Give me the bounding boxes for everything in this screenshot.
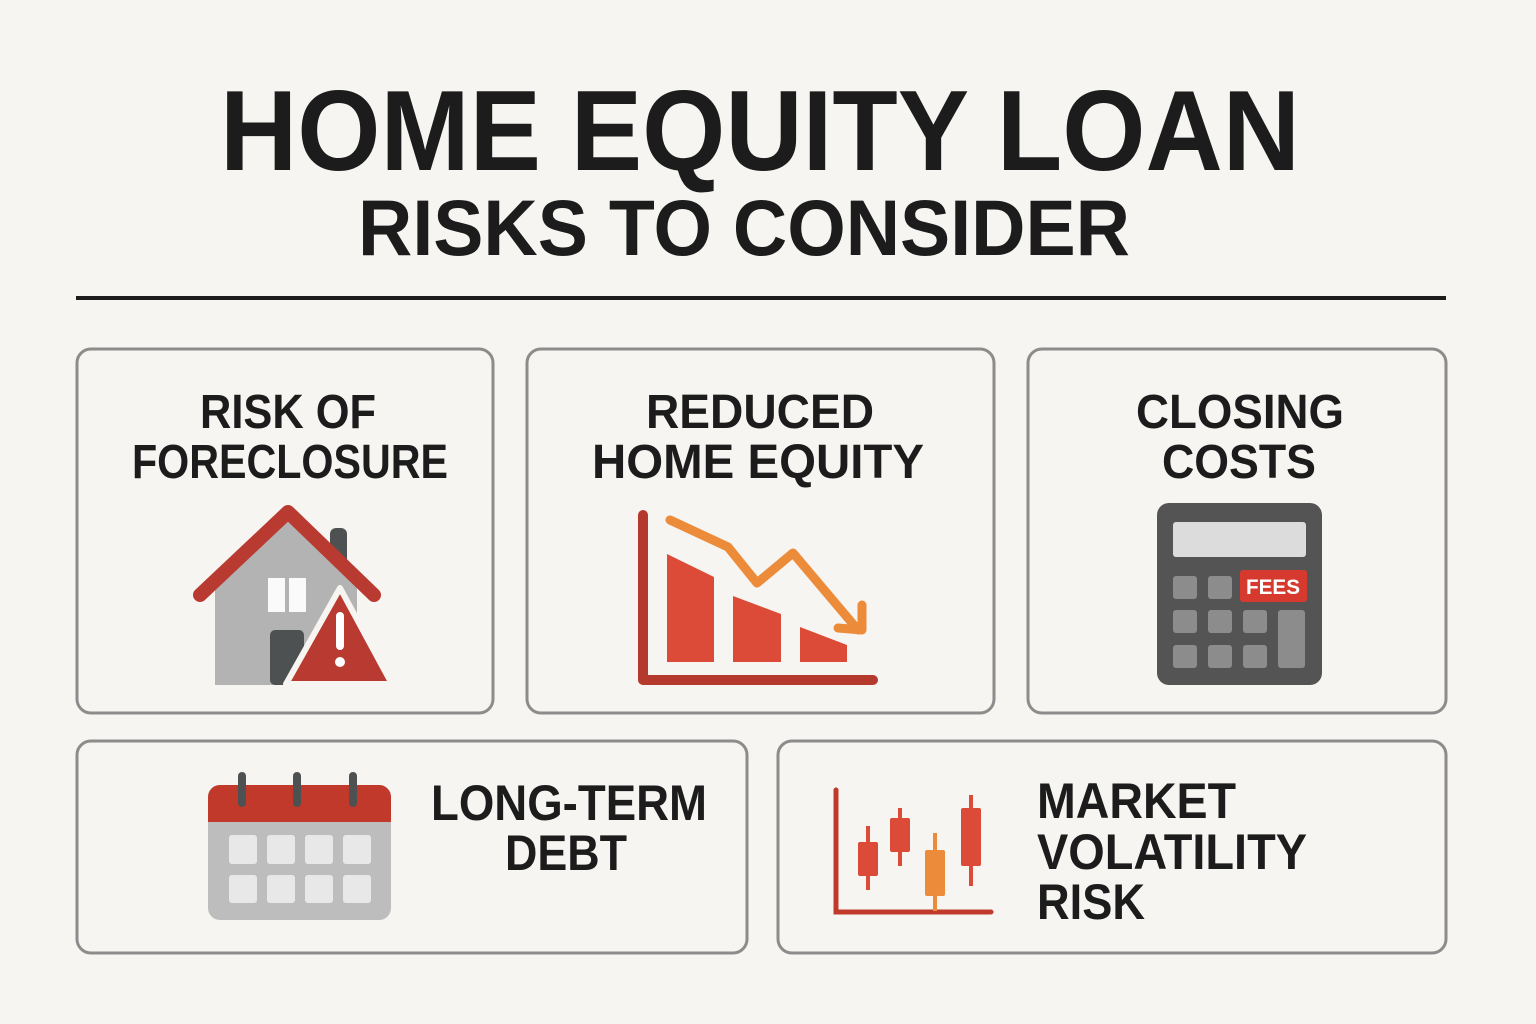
icon: calculator with fees: FEES <box>1246 576 1300 599</box>
heading: market volatility risk: RISK <box>1037 874 1145 930</box>
heading: reduced home equity <box>592 386 924 489</box>
icon: candlestick chart <box>836 790 991 912</box>
subtitle: RISKS TO CONSIDER <box>358 183 1130 272</box>
heading: long-term debt <box>431 775 707 881</box>
heading: long-term debt: LONG-TERM <box>431 775 707 831</box>
icon: calendar <box>208 772 391 920</box>
heading: closing costs <box>1136 386 1344 489</box>
heading: market volatility risk: MARKET <box>1037 773 1236 829</box>
panel: risk of foreclosure <box>77 349 493 713</box>
heading: reduced home equity: REDUCED <box>646 386 874 439</box>
heading: reduced home equity: HOME EQUITY <box>592 436 924 489</box>
title: HOME EQUITY LOAN <box>220 68 1300 195</box>
panel: closing costs <box>1028 349 1446 713</box>
icon: calculator with fees <box>1157 503 1322 685</box>
icon: house with warning <box>200 512 392 685</box>
icon: declining bar chart <box>643 515 873 680</box>
heading: closing costs: CLOSING <box>1136 386 1344 439</box>
heading: risk of foreclosure <box>132 386 448 489</box>
panel: market volatility risk <box>778 741 1446 953</box>
heading: market volatility risk <box>1037 773 1307 930</box>
panel: reduced home equity <box>527 349 994 713</box>
heading: market volatility risk: VOLATILITY <box>1037 824 1307 880</box>
panel: long-term debt <box>77 741 747 953</box>
heading: risk of foreclosure: FORECLOSURE <box>132 436 448 489</box>
heading: closing costs: COSTS <box>1162 436 1316 489</box>
heading: long-term debt: DEBT <box>505 825 627 881</box>
heading: risk of foreclosure: RISK OF <box>200 386 376 439</box>
